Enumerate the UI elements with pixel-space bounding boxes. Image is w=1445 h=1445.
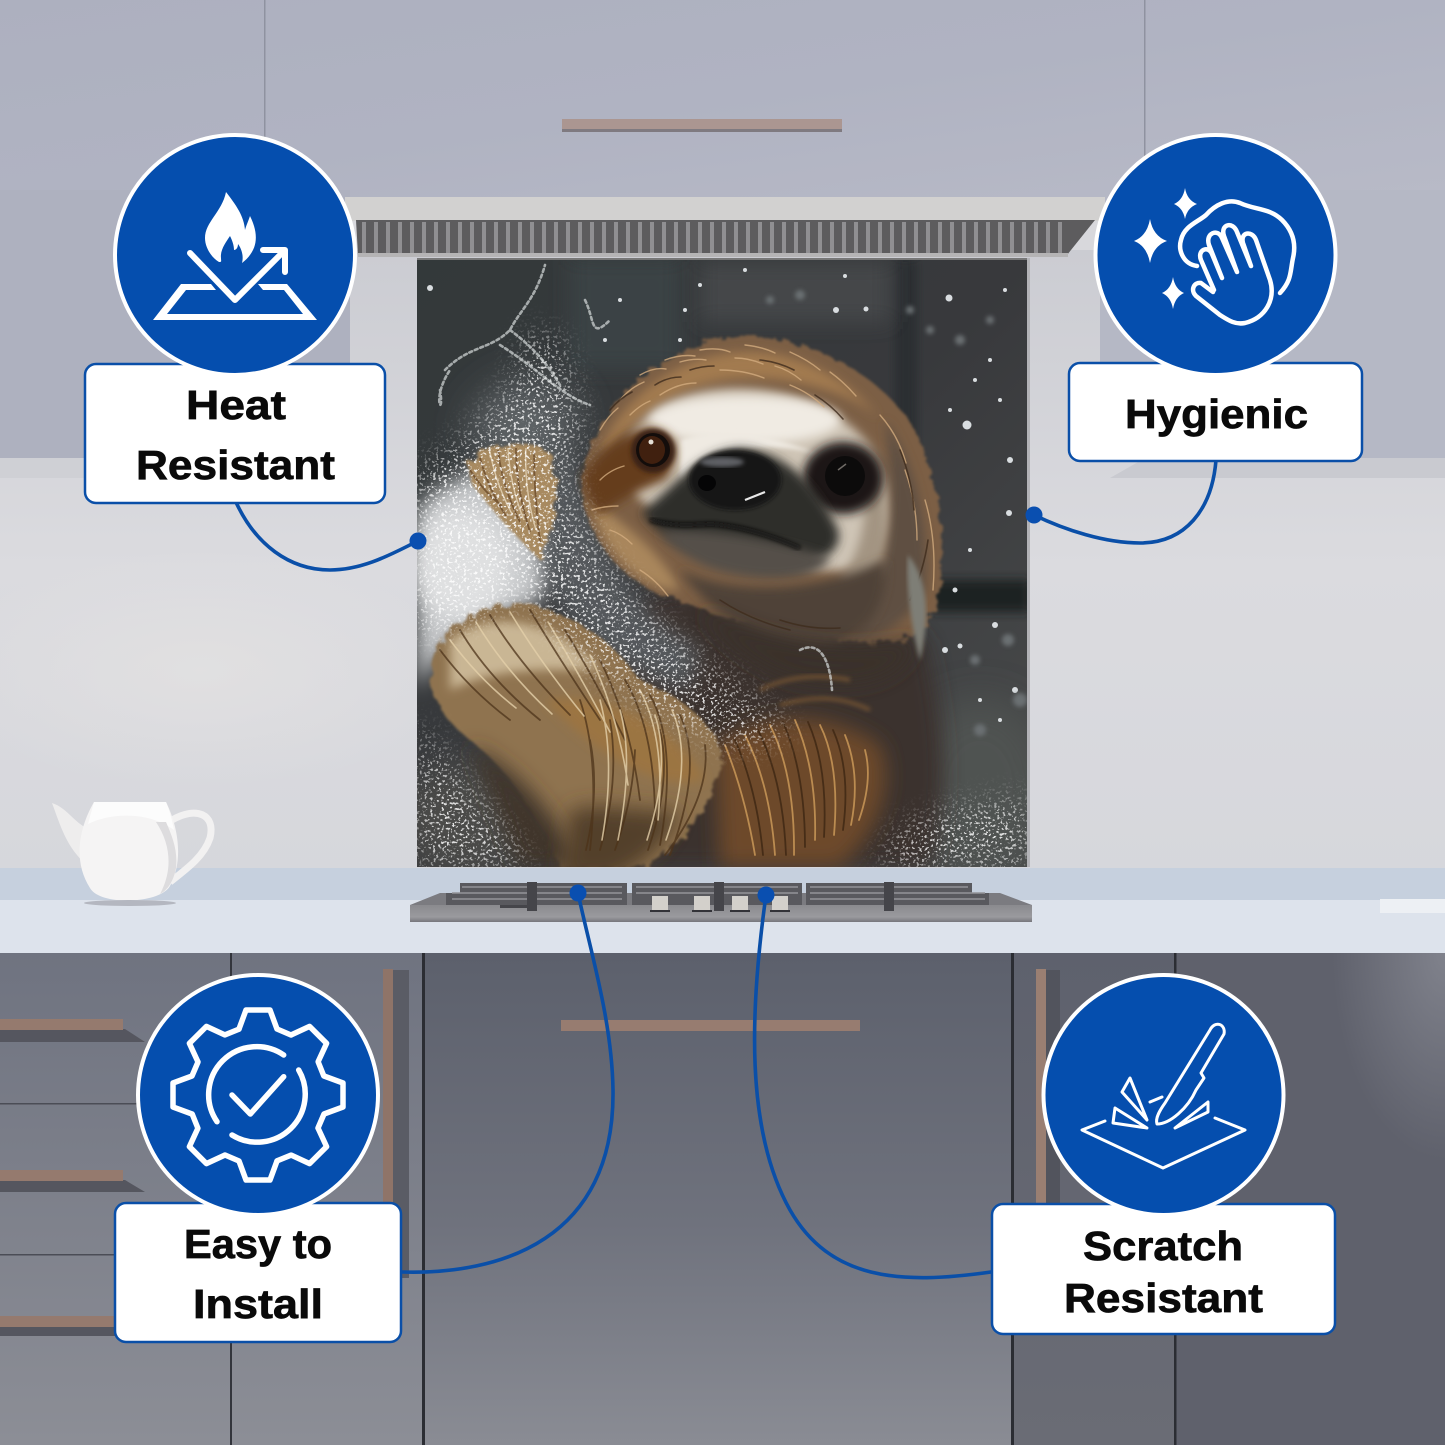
label box: easy to install bbox=[115, 1203, 401, 1342]
callout: heat resistant bbox=[85, 135, 385, 503]
icon: flame and reflecting arrow on surface bbox=[153, 192, 317, 320]
icon: hand wiping with sparkles bbox=[1134, 188, 1294, 323]
teapot bbox=[52, 802, 211, 906]
label box: heat resistant bbox=[85, 364, 385, 503]
chin fur bbox=[680, 560, 886, 645]
glass edge highlight bbox=[417, 258, 1027, 260]
brown eye mask bbox=[583, 428, 675, 515]
label box: easy to install: Install bbox=[193, 1281, 323, 1327]
soft light on wall bbox=[0, 550, 460, 790]
kitchen wall bbox=[0, 250, 1445, 880]
right dark eye patch bbox=[803, 442, 883, 514]
cabinet handle bbox=[562, 119, 842, 132]
lower cabinets bbox=[0, 953, 1445, 1445]
extractor hood bbox=[345, 197, 1105, 257]
label box: easy to install: Easy to bbox=[184, 1221, 332, 1267]
gas hob bbox=[410, 882, 1032, 922]
drawer handles bbox=[0, 969, 1060, 1336]
label box: hygienic bbox=[1069, 363, 1362, 461]
water splash speckles bbox=[417, 330, 1027, 867]
water foam bbox=[414, 380, 700, 690]
callout: easy to install bbox=[115, 975, 401, 1342]
connector: easy to install bbox=[402, 884, 613, 1272]
callout: scratch resistant bbox=[992, 975, 1335, 1334]
connector: scratch resistant bbox=[755, 886, 991, 1278]
head hair strokes bbox=[592, 345, 934, 596]
splashback shadow edge bbox=[1027, 258, 1030, 867]
label box: heat resistant: Resistant bbox=[136, 442, 335, 488]
callout: hygienic bbox=[1069, 135, 1362, 461]
head bbox=[580, 336, 941, 684]
head fade into body bbox=[708, 608, 912, 646]
label box: hygienic: Hygienic bbox=[1125, 391, 1308, 437]
left eye bbox=[631, 429, 675, 473]
connector: heat resistant bbox=[235, 500, 426, 570]
icon circle: hygienic bbox=[1096, 135, 1336, 375]
icon: knife scratching a surface bbox=[1082, 1024, 1245, 1168]
background tones bbox=[400, 258, 1050, 880]
dark muzzle bbox=[642, 448, 839, 565]
paw bbox=[468, 445, 556, 560]
icon circle: heat bbox=[115, 135, 355, 375]
icon circle: scratch bbox=[1044, 975, 1284, 1215]
wet strand by the neck bbox=[907, 555, 926, 660]
chest fur, rust bbox=[715, 719, 886, 867]
right eye bbox=[825, 456, 865, 496]
glass splashback: sloth in water bbox=[400, 258, 1050, 880]
label box: heat resistant: Heat bbox=[186, 382, 286, 428]
label box: scratch resistant: Scratch bbox=[1083, 1223, 1243, 1269]
label box: scratch resistant: Resistant bbox=[1064, 1275, 1263, 1321]
nose bbox=[689, 450, 781, 510]
arm bbox=[430, 604, 722, 880]
chest hair strands bbox=[725, 720, 868, 855]
body bbox=[640, 597, 951, 867]
mouth bbox=[650, 520, 800, 548]
countertop bbox=[0, 868, 1445, 953]
upper cabinets bbox=[0, 0, 1445, 478]
connector: hygienic bbox=[1026, 460, 1216, 543]
icon circle: install bbox=[138, 975, 378, 1215]
water droplets bbox=[427, 268, 1018, 722]
icon: gear with check mark bbox=[173, 1010, 343, 1180]
cream face band bbox=[622, 389, 887, 571]
cheek tan bbox=[590, 500, 680, 590]
label box: scratch resistant bbox=[992, 1204, 1335, 1334]
splash strands bbox=[439, 265, 832, 690]
